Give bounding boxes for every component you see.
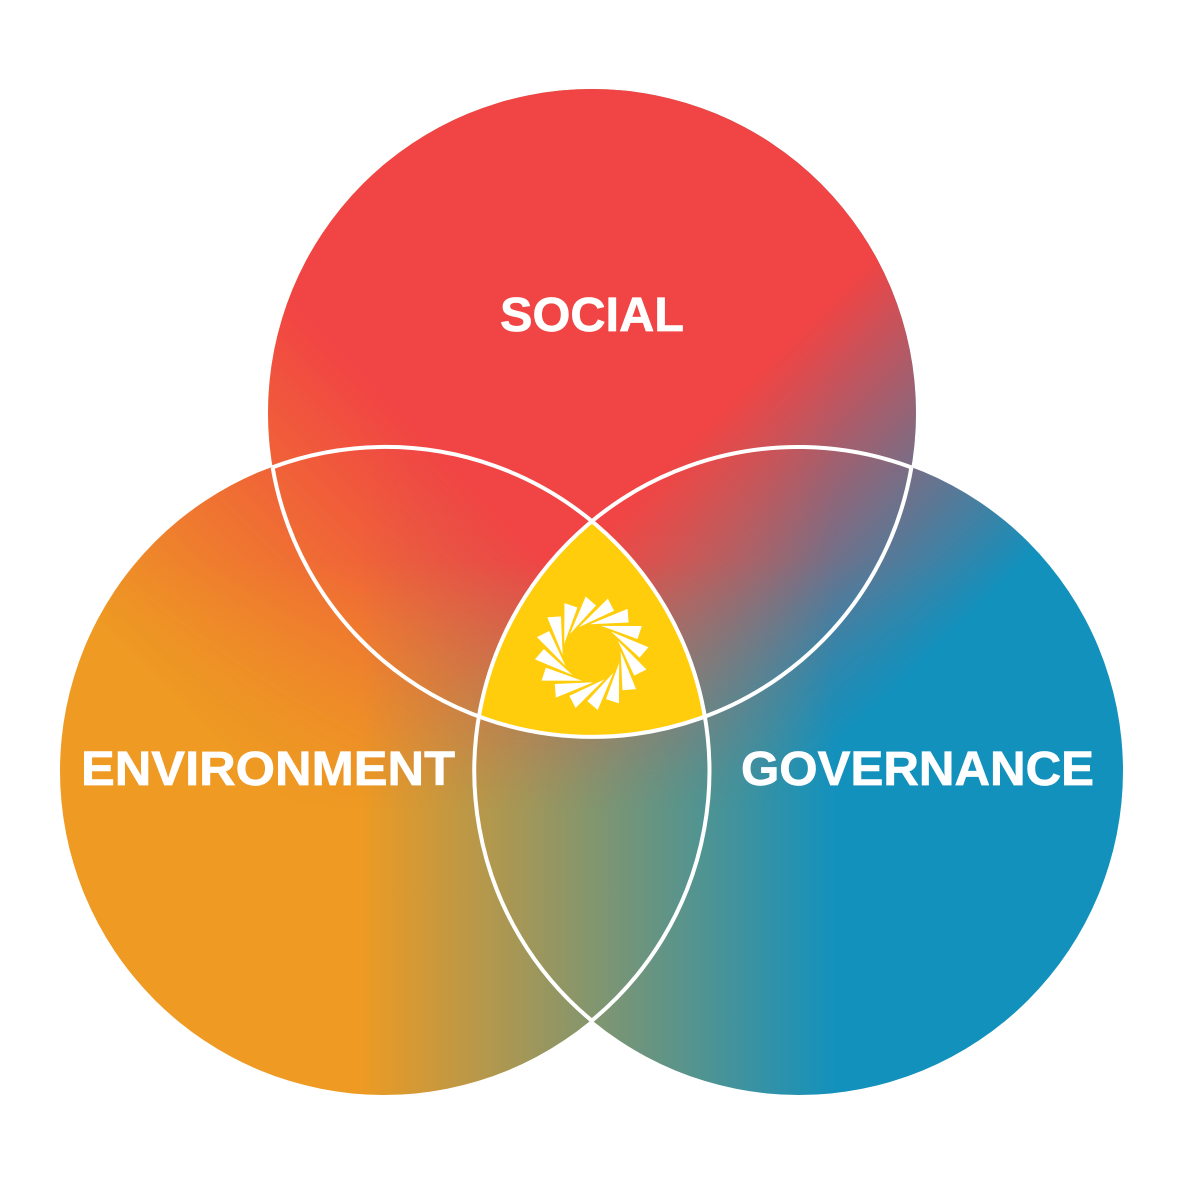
- panel: three overlapping gradient circles: [60, 89, 1123, 1095]
- label: Social: SOCIAL: [500, 289, 684, 342]
- center intersection: yellow: [479, 521, 705, 737]
- label: Governance: GOVERNANCE: [741, 743, 1094, 796]
- white circle outlines: [273, 447, 911, 1021]
- label: Environment: ENVIRONMENT: [81, 743, 455, 796]
- arc: governance circle: [474, 447, 911, 1021]
- icon: white sunburst logo: [534, 596, 649, 711]
- arc: social circle: [273, 467, 911, 737]
- arc: environment circle: [273, 447, 709, 1021]
